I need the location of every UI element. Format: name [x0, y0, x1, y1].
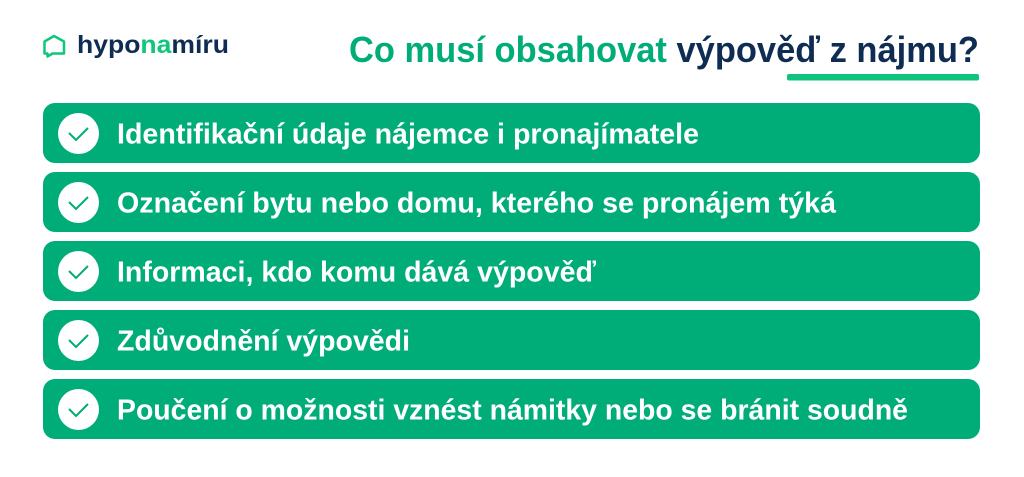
- icon: check 3: [58, 251, 99, 292]
- title text: Co musí obsahovat výpověď z nájmu?: [349, 29, 979, 70]
- icon: house speech bubble: [44, 36, 64, 56]
- logo wordmark: hyponamíru: [77, 31, 229, 59]
- panel: requirement 1: [43, 103, 980, 163]
- panel: requirement 5: [43, 379, 980, 439]
- text: requirement 2: Označení bytu nebo domu, kterého se pronájem týká: [117, 188, 837, 220]
- icon: check 5: [58, 389, 99, 430]
- icon: check 4: [58, 320, 99, 361]
- text: requirement 1: Identifikační údaje nájemce i pronajímatele: [117, 118, 699, 150]
- logo: [44, 31, 229, 59]
- panel: requirement 2: [43, 172, 980, 232]
- title underline: [787, 74, 979, 80]
- text: requirement 4: Zdůvodnění výpovědi: [117, 326, 410, 358]
- icon: check 2: [58, 182, 99, 223]
- icon: check 1: [58, 113, 99, 154]
- text: requirement 3: Informaci, kdo komu dává výpověď: [117, 256, 596, 288]
- text: requirement 5: Poučení o možnosti vznést námitky nebo se bránit soudně: [117, 394, 908, 426]
- panel: requirement 3: [43, 241, 980, 301]
- title: [349, 29, 979, 80]
- panel: requirement 4: [43, 310, 980, 370]
